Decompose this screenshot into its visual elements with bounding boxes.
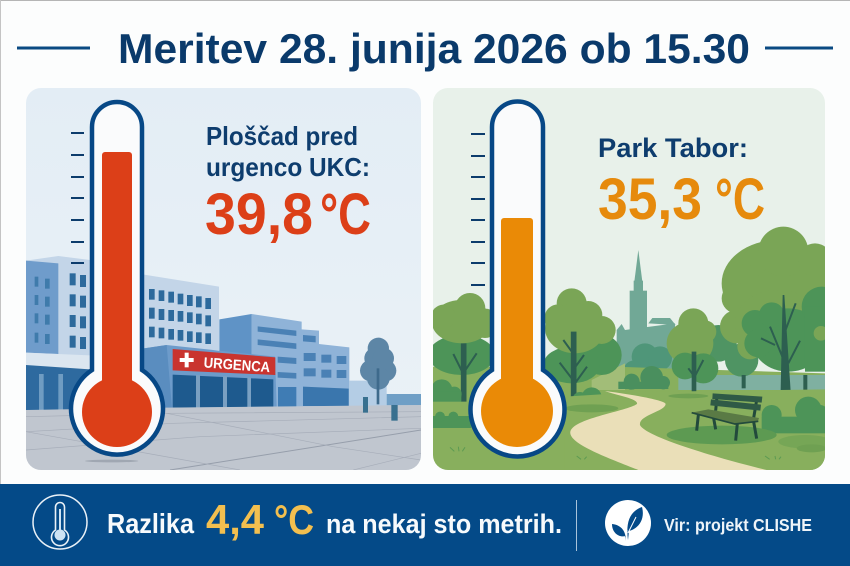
church [617, 250, 676, 380]
panel: Park Tabor [428, 88, 842, 470]
illustration: park with trees, path and bench [428, 227, 842, 470]
trees: left [433, 338, 490, 375]
thermometer: 35.3 [470, 102, 564, 456]
sign: URGENCA: URGENCA [203, 355, 271, 376]
trees: centre right [710, 325, 758, 377]
trees: centre left [543, 335, 622, 383]
scale ticks [471, 133, 485, 286]
label: Ploščad pred urgenco UKC: Ploščad pred [206, 121, 358, 151]
value: 39,8 °C: °C [320, 182, 371, 247]
label: Park Tabor: Park Tabor: [598, 133, 748, 163]
tree [360, 338, 396, 404]
difference message [107, 496, 562, 543]
icon: thermometer [33, 495, 87, 549]
title: Meritev 28. junija 2026 ob 15.30 [118, 25, 750, 72]
source: Vir: projekt CLISHE [664, 515, 812, 535]
value: 35,3 °C: °C [715, 167, 765, 232]
difference message: na nekaj sto metrih. [326, 509, 562, 539]
sign: URGENCA [173, 349, 275, 376]
difference message: Razlika [107, 508, 194, 539]
difference message: °C [274, 496, 314, 543]
difference message: 4,4 [206, 496, 265, 543]
path [570, 391, 767, 470]
meadow [565, 389, 825, 470]
value: 35,3 °C: 35,3 [598, 167, 702, 232]
bench [692, 393, 762, 441]
illustration: hospital building and plaza [26, 256, 421, 470]
trees: right [720, 227, 835, 359]
value: 39,8 °C: 39,8 [205, 182, 313, 247]
scale ticks [71, 132, 84, 264]
label: Ploščad pred urgenco UKC: urgenco UKC: [206, 152, 370, 182]
panel: urgent care plaza [26, 88, 421, 470]
icon: leaf [605, 500, 651, 546]
thermometer: 39.8 [71, 102, 163, 455]
bottom banner [0, 484, 850, 566]
